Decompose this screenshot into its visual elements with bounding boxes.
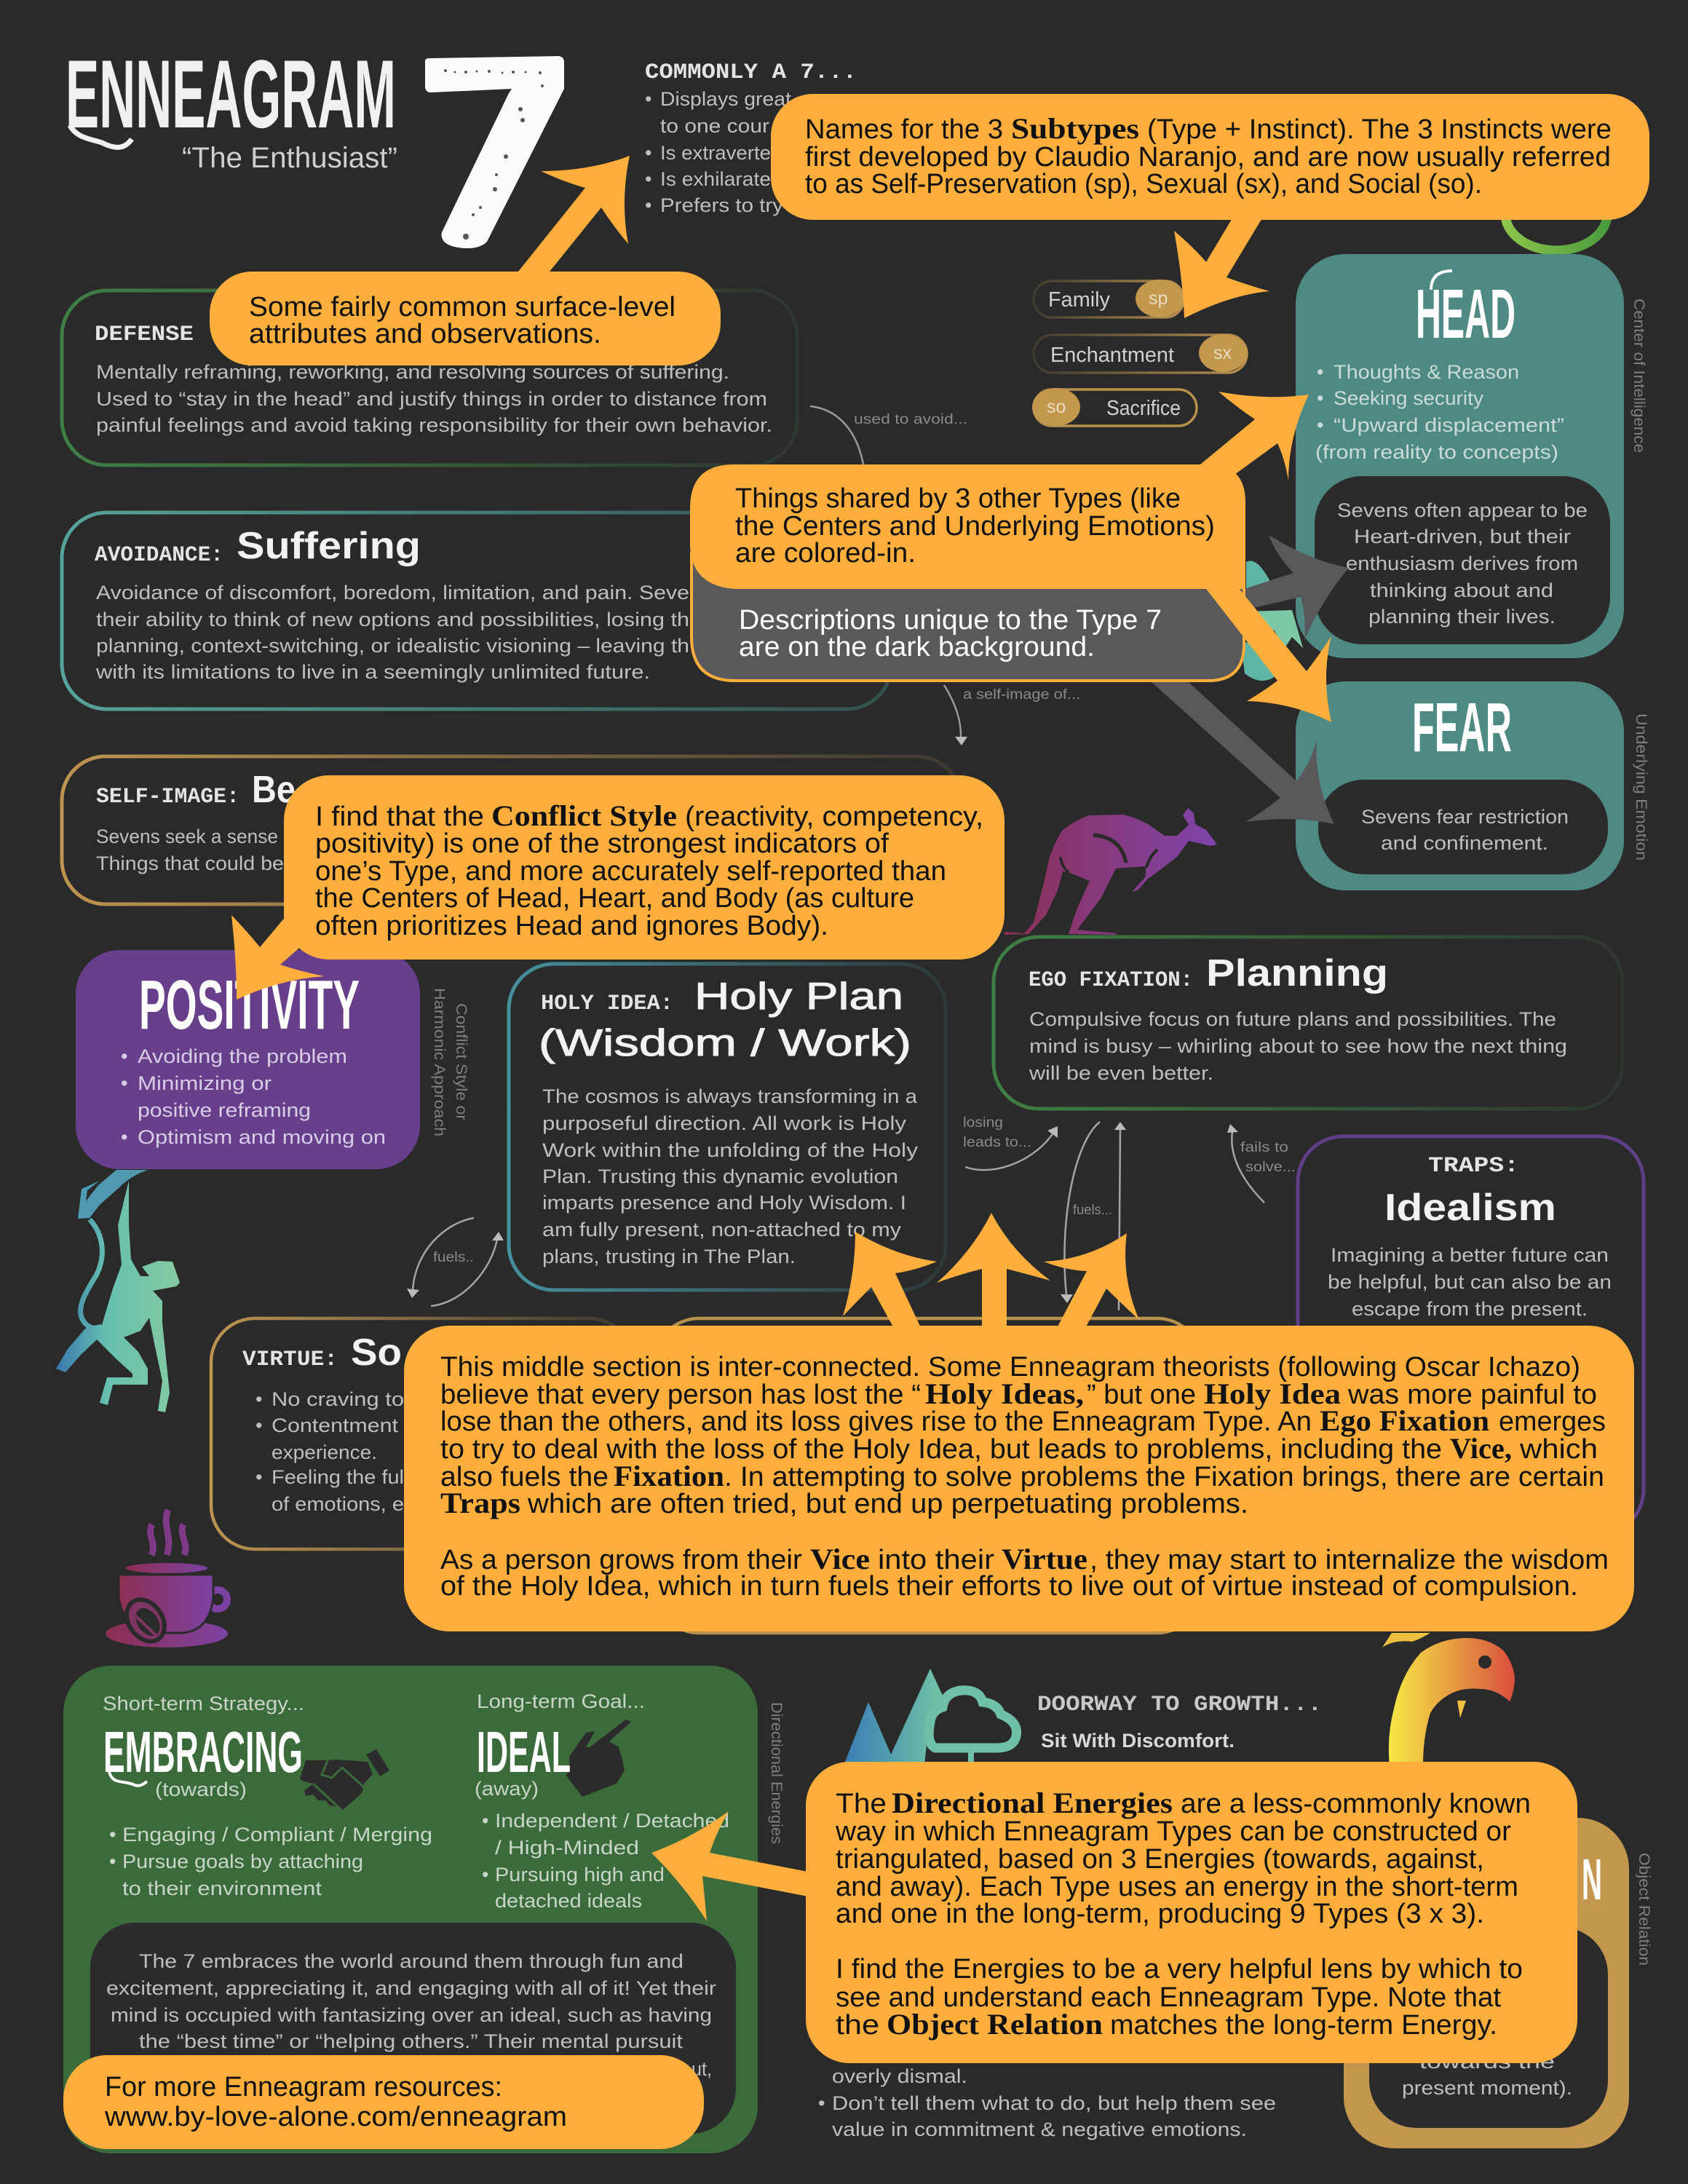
- callout: conflict style: often prioritizes Head and ignores Body).: [315, 911, 828, 941]
- inner text: sevens fear: Sevens fear restriction: [1361, 806, 1569, 828]
- text block: commonly a 7: Displays great: [660, 88, 792, 110]
- list: head attributes: •: [1317, 361, 1323, 383]
- heading: positivity: POSITIVITY: [139, 966, 360, 1044]
- subtype pills: [1032, 280, 1247, 426]
- callout: middle section explanation: was more painful to: [1347, 1380, 1597, 1410]
- panel: virtue: Feeling the ful: [272, 1466, 404, 1488]
- list: positivity attributes: positive reframing: [138, 1099, 311, 1121]
- panel: holy idea: The cosmos is always transforming in a: [542, 1085, 918, 1107]
- title: Enneagram: ENNEAGRAM: [66, 41, 396, 149]
- text block: commonly a 7: •: [645, 194, 651, 216]
- callout: directional energies: way in which Enneagram Types can be constructed or: [835, 1816, 1511, 1847]
- arrow: fuels fixation and vice: fuels...: [1073, 1203, 1112, 1218]
- panel: virtue: •: [255, 1466, 262, 1488]
- panel: holy idea: am fully present, non-attached to my: [542, 1219, 902, 1241]
- callout: surface-level attributes: attributes and observations.: [249, 319, 601, 349]
- callout: conflict style: positivity) is one of the strongest indicators of: [315, 828, 889, 859]
- column: short-term strategy: •: [109, 1851, 116, 1872]
- arrow: to holy idea: [843, 1232, 937, 1331]
- callout: middle section explanation: . In attempting to solve problems the Fixation brings, there are certain: [724, 1462, 1604, 1492]
- text block: commonly a 7: COMMONLY A 7...: [645, 60, 857, 85]
- panel: traps: Imagining a better future can: [1331, 1244, 1609, 1266]
- icon: coffee cup: [106, 1510, 228, 1652]
- callout: conflict style: [231, 775, 1005, 1000]
- callout: things shared and unique descriptions: [690, 392, 1349, 824]
- list: positivity attributes: Minimizing or: [138, 1072, 272, 1094]
- list: head attributes: •: [1317, 414, 1323, 436]
- panel: defense: painful feelings and avoid taking responsibility for their own behavior.: [96, 414, 772, 436]
- column: short-term strategy: •: [109, 1824, 116, 1845]
- list: positivity attributes: [121, 1045, 386, 1148]
- side label: underlying emotion: Underlying Emotion: [1633, 713, 1649, 860]
- column: short-term strategy: EMBRACING: [103, 1720, 303, 1784]
- text: unique descriptions: Descriptions unique to the Type 7: [739, 605, 1162, 636]
- panel: virtue: •: [255, 1415, 262, 1436]
- panel: object relation: [1344, 1818, 1629, 2148]
- panel: traps: TRAPS:: [1428, 1154, 1519, 1179]
- inner text: the 7 embraces: The 7 embraces the world around them through fun and: [139, 1950, 683, 1972]
- callout: middle section explanation: Holy Ideas,: [925, 1377, 1084, 1410]
- arrow: to positivity: [231, 910, 325, 1000]
- text: unique descriptions: [739, 605, 1162, 662]
- column: long-term goal: Pursuing high and: [495, 1864, 665, 1886]
- inner text: the 7 embraces: the “best time” or “helping others.” Their mental pursuit: [139, 2030, 683, 2052]
- arrow: to subtype pills: [1174, 217, 1269, 318]
- icon: mountains and cloud: [844, 1669, 1017, 1765]
- panel: object relation: towards the: [1419, 2051, 1555, 2073]
- callout: middle section explanation: Traps: [440, 1487, 520, 1519]
- icon: kangaroo: [1005, 808, 1217, 935]
- callout: subtypes: first developed by Claudio Naranjo, and are now usually referred: [805, 142, 1611, 173]
- side label: center of intelligence: Center of Intelligence: [1630, 298, 1647, 453]
- callout: subtypes: Names for the 3: [805, 114, 1003, 145]
- text block: commonly a 7: •: [645, 168, 651, 190]
- decoration: green ring: [1505, 178, 1607, 250]
- callout: middle section explanation: [404, 1213, 1634, 1631]
- text block: commonly a 7: to one cour: [660, 115, 769, 137]
- panel: virtue: Contentment: [272, 1415, 399, 1436]
- callout: directional energies: are a less-commonly known: [1181, 1789, 1531, 1819]
- callout: middle section explanation: emerges: [1499, 1406, 1606, 1437]
- arrow: to fuels link: [1044, 1233, 1139, 1331]
- arrow: losing leads to: leads to...: [963, 1135, 1031, 1150]
- list: positivity attributes: •: [121, 1126, 127, 1148]
- icon: handshake: [300, 1749, 389, 1811]
- panel: directional energies: [63, 1666, 758, 2153]
- arrow: fuels fixation and vice: [1061, 1122, 1126, 1310]
- panel: virtue: experience.: [272, 1441, 377, 1463]
- panel: avoidance: [62, 513, 892, 709]
- pill: enchantment: Enchantment: [1050, 344, 1174, 367]
- inner text: sevens head: Heart-driven, but their: [1354, 526, 1571, 547]
- panel: traps: [1298, 1136, 1644, 1535]
- callout: middle section explanation: , they may start to internalize the wisdom: [1090, 1545, 1609, 1575]
- callout: directional energies: and away). Each Type uses an energy in the short-term: [836, 1872, 1518, 1902]
- text: unique descriptions: are on the dark background.: [739, 632, 1095, 662]
- panel: virtue: of emotions, e: [272, 1493, 404, 1515]
- arrow: losing leads to: losing: [963, 1115, 1003, 1131]
- inner text: sevens head: [1315, 476, 1610, 644]
- text block: commonly a 7: Is exhilarate: [660, 168, 771, 190]
- inner text: sevens head: thinking about and: [1370, 579, 1553, 601]
- panel: avoidance: their ability to think of new options and possibilities, losing th: [96, 609, 689, 630]
- callout: middle section explanation: This middle section is inter-connected. Some Enneagram theorists (following Oscar Ichazo): [440, 1352, 1580, 1382]
- text: shared things: are colored-in.: [735, 538, 916, 569]
- callout: directional energies: matches the long-term Energy.: [1110, 2010, 1497, 2041]
- callout: directional energies: triangulated, based on 3 Energies (towards, against,: [836, 1844, 1484, 1875]
- panel: fear: [1296, 681, 1624, 890]
- inner text: sevens fear: and confinement.: [1381, 832, 1548, 854]
- pill: family: Family: [1048, 288, 1110, 312]
- inner text: sevens fear: [1318, 780, 1608, 874]
- column: short-term strategy: [103, 1693, 432, 1899]
- panel: self-image: SELF-IMAGE:: [96, 785, 239, 810]
- panel: avoidance: AVOIDANCE:: [95, 543, 223, 568]
- inner text: sevens head: enthusiasm derives from: [1346, 553, 1578, 574]
- pill: sacrifice: so: [1047, 397, 1066, 417]
- inner text: the 7 embraces: [90, 1923, 736, 2134]
- arrow: fuels virtue and holy idea: [407, 1218, 504, 1306]
- pill: enchantment: [1034, 334, 1247, 373]
- arrow: used to avoid: used to avoid...: [854, 412, 967, 427]
- heading: fear: FEAR: [1412, 689, 1512, 767]
- callout: middle section explanation: Vice: [810, 1543, 870, 1575]
- title: Enneagram: [66, 41, 396, 149]
- column: short-term strategy: Short-term Strategy...: [103, 1693, 304, 1714]
- text: shared things: Things shared by 3 other Types (like: [735, 483, 1181, 514]
- panel: ego fixation: will be even better.: [1029, 1062, 1213, 1084]
- callout: directional energies: and one in the long-term, producing 9 Types (3 x 3).: [836, 1899, 1484, 1929]
- arrow: a self-image of: a self-image of...: [963, 687, 1080, 703]
- arrow: fuels virtue and holy idea: fuels..: [433, 1250, 474, 1265]
- panel: defense: Used to “stay in the head” and justify things in order to distance from: [96, 388, 767, 410]
- callout: subtypes: to as Self-Preservation (sp), Sexual (sx), and Social (so).: [805, 169, 1482, 199]
- text block: doorway to growth: DOORWAY TO GROWTH...: [1037, 1693, 1322, 1717]
- big number 7: [425, 56, 564, 248]
- panel: holy idea: Work within the unfolding of the Holy: [542, 1139, 919, 1161]
- callout: conflict style: one’s Type, and more accurately self-reported than: [315, 856, 946, 887]
- arrow: fails to solve: solve...: [1245, 1160, 1296, 1175]
- text block: doorway to growth: overly dismal.: [832, 2065, 967, 2087]
- callout: directional energies: see and understand each Enneagram Type. Note that: [836, 1982, 1501, 2013]
- text block: commonly a 7: [645, 60, 857, 216]
- column: long-term goal: •: [482, 1864, 488, 1886]
- text block: doorway to growth: Don’t tell them what to do, but help them see: [832, 2092, 1276, 2114]
- list: head attributes: •: [1317, 387, 1323, 409]
- callout: middle section explanation: As a person grows from their: [440, 1545, 802, 1575]
- arrow: used to avoid: [810, 406, 967, 473]
- callout: directional energies: Object Relation: [887, 2008, 1103, 2041]
- panel: object relation: N: [1582, 1847, 1602, 1912]
- list: positivity attributes: •: [121, 1072, 127, 1094]
- pill: family: [1034, 280, 1184, 317]
- panel: holy idea: imparts presence and Holy Wisdom. I: [542, 1192, 906, 1214]
- arrow: grey to fear: [1152, 682, 1334, 824]
- callout: directional energies: The: [836, 1789, 887, 1819]
- callout: conflict style: (reactivity, competency,: [685, 802, 983, 832]
- callout: middle section explanation: to try to deal with the loss of the Holy Idea, but leads to problems, including the: [440, 1434, 1442, 1465]
- side label: directional energies: Directional Energies: [768, 1702, 785, 1844]
- panel: holy idea: purposeful direction. All work is Holy: [542, 1112, 907, 1134]
- side label: conflict style: Conflict Style or: [453, 1003, 469, 1120]
- callout: middle section explanation: of the Holy Idea, which in turn fuels their efforts to live out of virtue instead of compulsion.: [440, 1571, 1578, 1602]
- panel: virtue: [211, 1318, 633, 1549]
- icon: pointing hand: [566, 1720, 631, 1797]
- text block: doorway to growth: value in commitment & negative emotions.: [832, 2118, 1247, 2140]
- callout: middle section explanation: Fixation: [614, 1460, 724, 1492]
- callout: middle section explanation: Holy Idea: [1204, 1377, 1341, 1410]
- callout: directional energies: Directional Energies: [892, 1787, 1173, 1819]
- panel: traps: Idealism: [1384, 1187, 1556, 1229]
- callout: middle section explanation: lose than the others, and its loss gives rise to the Enneagram Type. An: [440, 1406, 1312, 1437]
- subtitle: The Enthusiast: “The Enthusiast”: [182, 142, 397, 174]
- callout: more resources: www.by-love-alone.com/enneagram: [104, 2102, 567, 2132]
- panel: self-image: [62, 756, 961, 904]
- callout: directional energies: the: [836, 2010, 879, 2041]
- callout: surface-level attributes: Some fairly common surface-level: [249, 292, 675, 323]
- text block: commonly a 7: •: [645, 142, 651, 164]
- panel: virtue: No craving to: [272, 1388, 404, 1410]
- panel: defense: [62, 290, 797, 465]
- callout: middle section explanation: believe that every person has lost the “: [440, 1380, 921, 1410]
- pill: sacrifice: Sacrifice: [1106, 397, 1181, 420]
- text block: doorway to growth: Sit With Discomfort.: [1041, 1730, 1235, 1752]
- panel: avoidance: with its limitations to live in a seemingly unlimited future.: [95, 661, 650, 683]
- list: positivity attributes: Optimism and moving on: [138, 1126, 386, 1148]
- inner text: the 7 embraces: mind is occupied with fantasizing over an ideal, such as having: [111, 2004, 712, 2026]
- side label: object relation: Object Relation: [1636, 1853, 1652, 1966]
- panel: ego fixation: Planning: [1206, 952, 1388, 994]
- panel: holy idea: [509, 964, 946, 1290]
- panel: orange section: [690, 464, 1245, 589]
- inner text: sevens head: planning their lives.: [1368, 606, 1556, 628]
- arrow: fails to solve: fails to: [1240, 1140, 1288, 1155]
- column: short-term strategy: to their environment: [122, 1878, 322, 1899]
- panel: self-image: Things that could be: [96, 852, 284, 874]
- arrow: to ideal: [651, 1811, 812, 1921]
- callout: middle section explanation: which are often tried, but end up perpetuating problems.: [527, 1489, 1248, 1519]
- panel: vice (covered): [655, 1318, 1201, 1633]
- callout: directional energies: [651, 1762, 1577, 2063]
- text: shared things: [735, 483, 1215, 569]
- panel: avoidance: Avoidance of discomfort, boredom, limitation, and pain. Seve: [96, 582, 689, 604]
- column: long-term goal: / High-Minded: [495, 1837, 639, 1859]
- text block: commonly a 7: Is extraverte: [660, 142, 771, 164]
- list: positivity attributes: •: [121, 1045, 127, 1067]
- callout: middle section explanation: Virtue: [1002, 1543, 1087, 1575]
- text block: doorway to growth: •: [818, 2092, 825, 2114]
- list: head attributes: Thoughts & Reason: [1334, 361, 1519, 383]
- pill: sacrifice: [1032, 388, 1197, 426]
- panel: holy idea: HOLY IDEA:: [541, 992, 673, 1016]
- inner text: the 7 embraces: excitement, appreciating it, and engaging with all of it! Yet their: [106, 1977, 716, 1999]
- list: head attributes: “Upward displacement”: [1334, 414, 1564, 436]
- icon: monkey: [56, 1170, 180, 1412]
- column: long-term goal: •: [482, 1810, 488, 1832]
- callout: surface-level attributes: [210, 156, 721, 365]
- text block: doorway to growth: [818, 1693, 1322, 2140]
- arrow: orange to fear: [1204, 575, 1331, 722]
- arrow: losing leads to: [963, 1115, 1058, 1170]
- panel: holy idea: Plan. Trusting this dynamic evolution: [542, 1166, 898, 1187]
- arrow: to fixation link: [937, 1213, 1050, 1331]
- inner text: the 7 embraces: ut,: [692, 2058, 712, 2080]
- text block: commonly a 7: Prefers to try: [660, 194, 784, 216]
- callout: directional energies: I find the Energies to be a very helpful lens by which to: [836, 1954, 1523, 1985]
- panel: self-image: Sevens seek a sense: [96, 826, 278, 847]
- callout: middle section explanation: Ego Fixation: [1320, 1404, 1489, 1437]
- column: long-term goal: detached ideals: [495, 1890, 642, 1912]
- column: long-term goal: Independent / Detached: [495, 1810, 729, 1832]
- text: shared things: the Centers and Underlying Emotions): [735, 511, 1215, 542]
- panel: traps: be helpful, but can also be an: [1328, 1271, 1612, 1293]
- callout: middle section explanation: ” but one: [1087, 1380, 1196, 1410]
- panel: holy idea: (Wisdom / Work): [539, 1022, 911, 1064]
- list: positivity attributes: Avoiding the problem: [138, 1045, 347, 1067]
- panel: defense: Mentally reframing, reworking, and resolving sources of suffering.: [96, 361, 729, 383]
- side label: conflict style: Harmonic Approach: [431, 988, 448, 1136]
- panel: ego fixation: EGO FIXATION:: [1029, 968, 1193, 993]
- panel: virtue: VIRTUE:: [242, 1348, 338, 1372]
- heading: head: [1416, 271, 1515, 353]
- column: long-term goal: (away): [475, 1778, 539, 1800]
- callout: more resources: [63, 2055, 704, 2149]
- heading: head: HEAD: [1416, 275, 1515, 353]
- callout: middle section explanation: Vice,: [1450, 1432, 1512, 1465]
- column: long-term goal: [475, 1690, 729, 1912]
- callout: middle section explanation: into their: [878, 1545, 994, 1575]
- panel: ego fixation: Compulsive focus on future plans and possibilities. The: [1029, 1008, 1556, 1030]
- decoration: monstera leaf: [1241, 561, 1303, 681]
- panel: holy idea: Holy Plan: [694, 976, 903, 1018]
- callout: middle section explanation: also fuels the: [440, 1462, 609, 1492]
- column: long-term goal: IDEAL: [477, 1720, 571, 1784]
- text block: commonly a 7: •: [645, 88, 651, 110]
- list: head attributes: Seeking security: [1334, 387, 1484, 409]
- pill: family: sp: [1149, 288, 1168, 309]
- side label: conflict style: [431, 988, 469, 1136]
- arrow: orange to head: [1197, 392, 1309, 480]
- callout: conflict style: Conflict Style: [491, 799, 677, 832]
- icon: bird: [1382, 1633, 1515, 1765]
- arrow: grey to head: [1237, 535, 1349, 641]
- callout: subtypes: (Type + Instinct). The 3 Instincts were: [1147, 114, 1612, 145]
- panel: avoidance: planning, context-switching, or idealistic visioning – leaving th: [96, 635, 689, 657]
- panel: virtue: •: [255, 1388, 262, 1410]
- arrow: to commonly a 7: [515, 156, 630, 275]
- inner text: sevens head: Sevens often appear to be: [1337, 499, 1588, 521]
- panel: object relation: present moment).: [1402, 2077, 1572, 2099]
- column: long-term goal: Long-term Goal...: [477, 1690, 645, 1712]
- panel: virtue: So: [351, 1332, 402, 1374]
- panel: traps: escape from the present.: [1352, 1298, 1588, 1320]
- arrow: a self-image of: [944, 685, 1080, 745]
- panel: ego fixation: [994, 937, 1622, 1109]
- panel: positivity: [76, 950, 420, 1169]
- panel: head: [1296, 254, 1624, 658]
- arrow: fails to solve: [1227, 1124, 1296, 1203]
- column: short-term strategy: Engaging / Compliant / Merging: [122, 1824, 432, 1845]
- callout: conflict style: the Centers of Head, Heart, and Body (as culture: [315, 883, 914, 914]
- panel: avoidance: Suffering: [237, 525, 421, 567]
- list: head attributes: [1315, 361, 1564, 463]
- panel: holy idea: plans, trusting in The Plan.: [542, 1246, 796, 1267]
- column: short-term strategy: Pursue goals by attaching: [122, 1851, 363, 1872]
- pill: enchantment: sx: [1213, 343, 1232, 363]
- panel: dark section: [692, 553, 1244, 681]
- column: short-term strategy: (towards): [155, 1779, 247, 1800]
- callout: subtypes: Subtypes: [1011, 112, 1139, 145]
- callout: more resources: For more Enneagram resources:: [105, 2072, 502, 2102]
- list: head attributes: (from reality to concepts): [1315, 441, 1558, 463]
- panel: ego fixation: mind is busy – whirling about to see how the next thing: [1029, 1035, 1567, 1057]
- callout: middle section explanation: which: [1519, 1434, 1598, 1465]
- panel: self-image: Be: [252, 769, 296, 811]
- callout: conflict style: I find that the: [315, 802, 484, 832]
- callout: subtypes: [771, 94, 1649, 318]
- panel: defense: DEFENSE: [95, 323, 194, 347]
